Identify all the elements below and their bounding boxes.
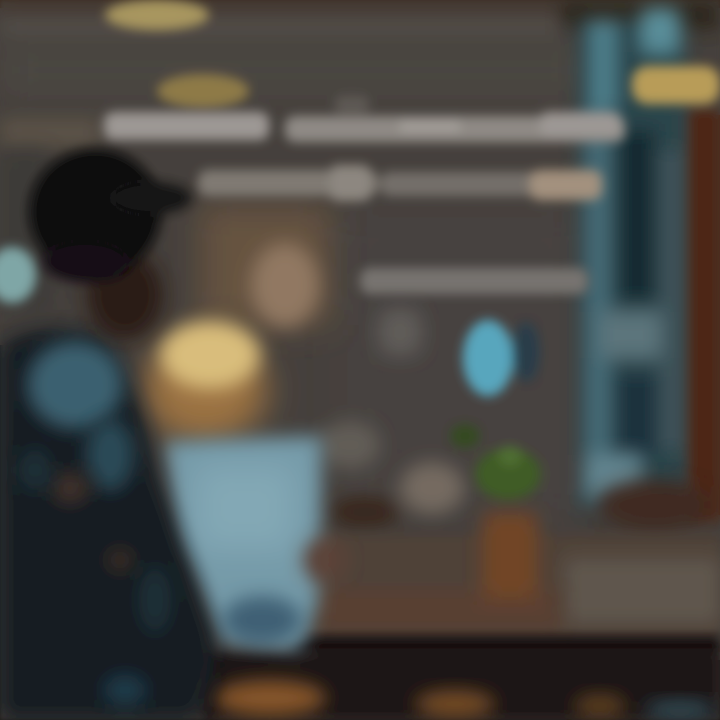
- plant pot: [482, 512, 538, 600]
- teal window panels: [578, 8, 686, 510]
- pendant lamp middle: [157, 74, 249, 108]
- blurred small shape: [378, 308, 422, 356]
- person cap: [29, 148, 192, 282]
- table edge: [290, 636, 720, 656]
- blurred headline band one: [104, 96, 625, 142]
- person silhouette: [0, 148, 215, 720]
- ceiling band: [0, 0, 720, 38]
- blurred headline band three: [360, 268, 588, 294]
- left edge light: [0, 247, 36, 303]
- pendant lamp top: [105, 0, 209, 30]
- wooden column: [690, 110, 720, 520]
- hand at laptop: [303, 538, 347, 582]
- table top: [310, 535, 720, 635]
- laptop screen: [165, 436, 322, 650]
- plant: [450, 424, 541, 500]
- table lamp glow: [143, 321, 267, 442]
- blue drop icon: [463, 320, 540, 396]
- background objects on table: [320, 421, 713, 531]
- person body: [0, 328, 215, 720]
- lower floor: [200, 652, 720, 720]
- blurred headline band two: [198, 165, 602, 201]
- pendant lamp right: [632, 66, 720, 104]
- warm glow wall: [251, 243, 319, 327]
- person neck and beard: [87, 251, 163, 339]
